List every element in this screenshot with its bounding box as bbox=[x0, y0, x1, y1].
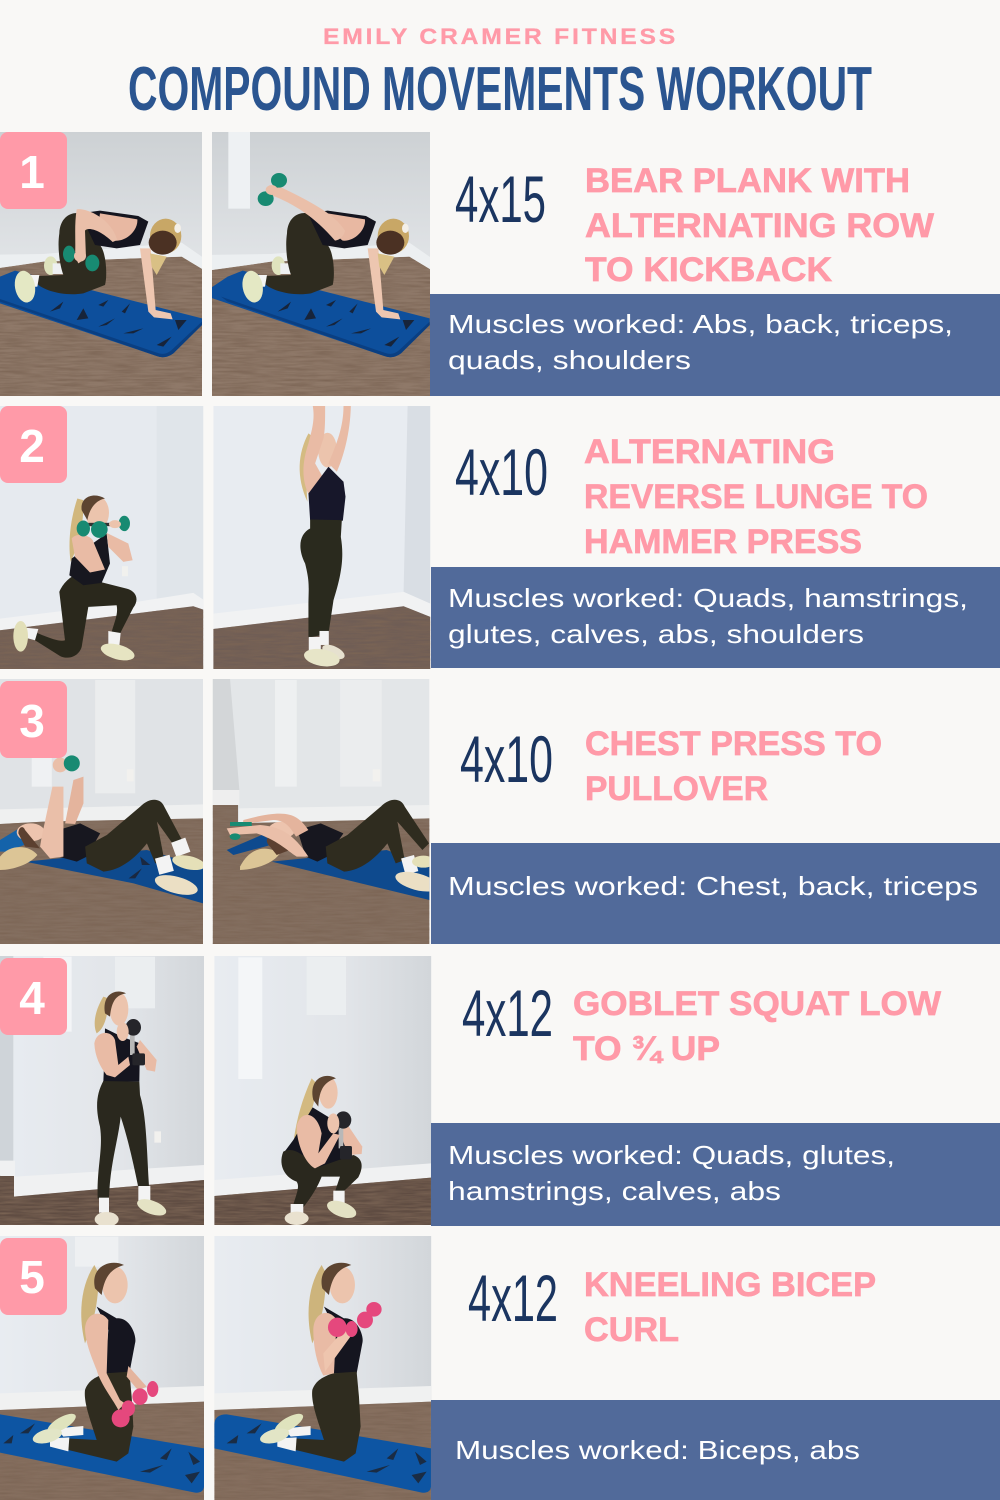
number badge 3: 3 bbox=[19, 695, 45, 747]
exercise 5 bbox=[0, 1236, 1000, 1500]
exercise name 1 bbox=[585, 162, 935, 289]
number badge 2 bbox=[0, 406, 67, 483]
reps 1: 4x15 bbox=[455, 162, 546, 236]
muscles band 2: Muscles worked: Quads, hamstrings, bbox=[448, 583, 968, 613]
number badge 3 bbox=[0, 681, 67, 758]
exercise name 4: GOBLET SQUAT LOW bbox=[573, 985, 942, 1023]
number badge 4 bbox=[0, 958, 67, 1035]
reps 2: 4x10 bbox=[455, 435, 548, 509]
muscles band 1: Muscles worked: Abs, back, triceps, bbox=[448, 309, 953, 339]
photo: goblet squat up bbox=[0, 956, 204, 1225]
exercise name 3: CHEST PRESS TO bbox=[585, 725, 882, 763]
photo: hammer press bbox=[213, 406, 430, 669]
muscles band 4: Muscles worked: Quads, glutes, bbox=[448, 1140, 895, 1170]
reps 5: 4x12 bbox=[468, 1261, 558, 1335]
muscles band 2: glutes, calves, abs, shoulders bbox=[448, 619, 864, 649]
muscles band 2 bbox=[431, 567, 1000, 668]
exercise name 5: KNEELING BICEP bbox=[584, 1266, 876, 1304]
number badge 1 bbox=[0, 132, 67, 209]
muscles band 3 bbox=[431, 843, 1000, 944]
exercise name 2 bbox=[584, 433, 928, 561]
photo: goblet squat low bbox=[214, 956, 432, 1225]
exercise name 1: TO KICKBACK bbox=[585, 251, 832, 289]
exercise name 4: TO ¾ UP bbox=[573, 1030, 720, 1068]
photo: bear plank row bbox=[0, 132, 202, 396]
exercise 2 bbox=[0, 406, 1000, 669]
muscles band 1: quads, shoulders bbox=[448, 345, 691, 375]
photo: kneeling arms down bbox=[0, 1236, 204, 1500]
muscles band 4: hamstrings, calves, abs bbox=[448, 1176, 781, 1206]
muscles band 3: Muscles worked: Chest, back, triceps bbox=[448, 871, 978, 901]
exercise name 1: ALTERNATING ROW bbox=[585, 207, 935, 245]
number badge 5 bbox=[0, 1238, 67, 1315]
photo: reverse lunge bbox=[0, 406, 204, 669]
exercise 3 bbox=[0, 679, 1000, 944]
photo: kneeling curl bbox=[214, 1236, 432, 1500]
exercise name 5 bbox=[584, 1266, 876, 1349]
exercise name 2: REVERSE LUNGE TO bbox=[584, 478, 928, 516]
reps 4: 4x12 bbox=[462, 976, 553, 1050]
reps 3: 4x10 bbox=[460, 722, 553, 796]
brand name: EMILY CRAMER FITNESS bbox=[323, 24, 678, 49]
exercise name 4 bbox=[573, 985, 942, 1068]
header bbox=[128, 24, 872, 124]
muscles band 1 bbox=[430, 294, 1000, 396]
exercise name 1: BEAR PLANK WITH bbox=[585, 162, 910, 200]
muscles band 5 bbox=[431, 1400, 1000, 1500]
number badge 2: 2 bbox=[19, 420, 45, 472]
exercise 1 bbox=[0, 132, 1000, 400]
photo: chest press bbox=[0, 679, 203, 944]
muscles band 5: Muscles worked: Biceps, abs bbox=[455, 1435, 860, 1465]
exercise name 2: HAMMER PRESS bbox=[584, 523, 862, 561]
muscles band 4 bbox=[431, 1123, 1000, 1226]
number badge 1: 1 bbox=[19, 146, 45, 198]
number badge 4: 4 bbox=[19, 972, 45, 1024]
exercise name 3 bbox=[585, 725, 882, 808]
exercise 4 bbox=[0, 956, 1000, 1227]
exercise name 5: CURL bbox=[584, 1311, 679, 1349]
number badge 5: 5 bbox=[19, 1251, 45, 1303]
exercise name 2: ALTERNATING bbox=[584, 433, 835, 471]
photo: bear plank kickback bbox=[212, 132, 430, 396]
photo: pullover bbox=[212, 679, 430, 944]
exercise name 3: PULLOVER bbox=[585, 770, 768, 808]
